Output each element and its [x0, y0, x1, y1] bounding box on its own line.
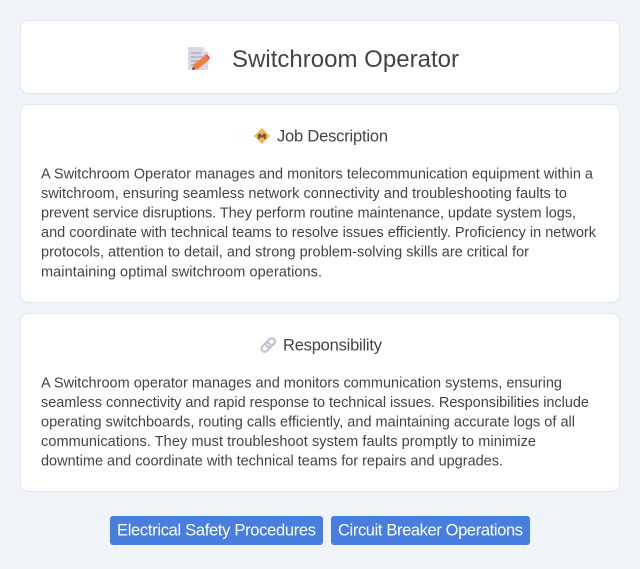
text block: responsibility: downtime and coordinate with technical teams for repairs and upgrades. — [41, 454, 503, 470]
icon: diamond sign — [254, 128, 270, 144]
text block: responsibility: seamless connectivity and rapid response to technical issues. Responsibilities include — [41, 395, 589, 411]
text block: responsibility — [41, 376, 589, 470]
panel: job description — [20, 104, 620, 302]
text block: job description: and coordinate with technical teams to resolve issues efficiently. Proficiency in network — [41, 225, 597, 241]
tag: Circuit Breaker Operations: Circuit Breaker Operations — [338, 522, 523, 540]
text block: responsibility: A Switchroom operator manages and monitors communication systems, ensuring — [41, 376, 562, 392]
text block: job description: switchroom, ensuring seamless network connectivity and troubleshooting faults to — [41, 186, 567, 202]
heading: responsibility: Responsibility — [283, 336, 383, 354]
tag: Electrical Safety Procedures: Electrical Safety Procedures — [117, 522, 316, 540]
text block: job description: protocols, attention to detail, and strong problem-solving skills are critical for — [41, 245, 529, 261]
panel: title — [20, 20, 620, 94]
heading: job description: Job Description — [277, 128, 388, 146]
text block: job description — [41, 166, 597, 280]
text block: job description: maintaining optimal switchroom operations. — [41, 264, 322, 280]
panel: responsibility — [20, 314, 620, 492]
text block: job description: A Switchroom Operator manages and monitors telecommunication equipment within a — [41, 166, 594, 182]
tag: Circuit Breaker Operations — [331, 516, 530, 545]
text block: responsibility: communications. They must troubleshoot system faults promptly to minimize — [41, 434, 536, 450]
text block: job description: prevent service disruptions. They perform routine maintenance, update system logs, — [41, 206, 576, 222]
tag: Electrical Safety Procedures — [110, 516, 323, 545]
icon: document with pencil — [188, 47, 210, 70]
heading: Switchroom Operator: Switchroom Operator — [232, 46, 459, 73]
icon: chain link — [260, 337, 276, 353]
text block: responsibility: operating switchboards, routing calls efficiently, and maintaining accurate logs of all — [41, 414, 575, 430]
